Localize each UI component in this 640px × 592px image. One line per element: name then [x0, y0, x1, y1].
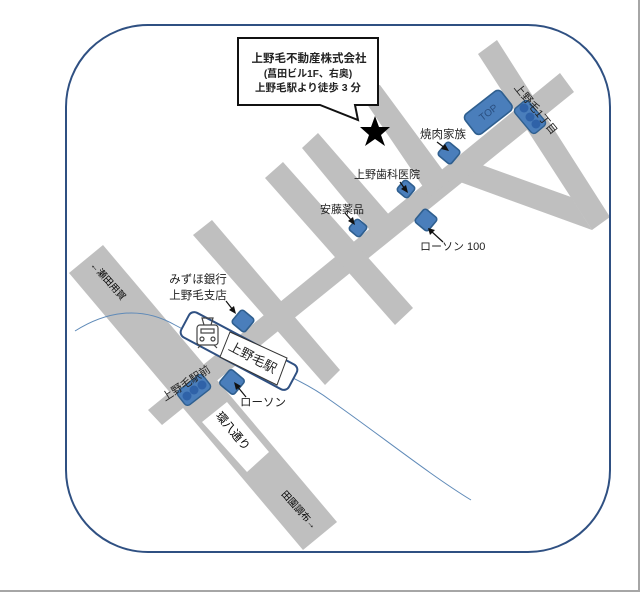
building: dental [396, 179, 416, 199]
signal label: station front: 上野毛駅前 [159, 362, 213, 404]
callout: (菖田ビル1F、右奥) [264, 67, 352, 80]
label: dental: 上野歯科医院 [354, 167, 420, 181]
building: Lawson [219, 369, 245, 395]
label: drugstore: 安藤薬品 [320, 203, 364, 216]
building: yakiniku [437, 141, 461, 165]
label: Mizuho bank: 上野毛支店 [169, 289, 227, 302]
TOP building: TOP [478, 102, 501, 124]
station [179, 310, 299, 392]
arrow: drugstore [345, 213, 355, 225]
label: yakiniku: 焼肉家族 [420, 127, 466, 141]
callout: 上野毛駅より徒歩 3 分 [255, 81, 361, 94]
signal label: 1-chome: 上野毛1丁目 [511, 81, 560, 137]
icon: train [197, 318, 218, 348]
label: Mizuho bank [169, 272, 227, 302]
road label: Kanpachi [202, 402, 269, 472]
arrow: Mizuho [226, 301, 236, 314]
TOP building [462, 88, 514, 136]
arrow: Lawson 100 [428, 228, 443, 242]
railway line [75, 313, 471, 500]
arrow: Lawson [234, 382, 246, 397]
station name box: 上野毛駅 [226, 339, 279, 376]
callout [238, 38, 378, 120]
callout: 上野毛不動産株式会社 [252, 51, 367, 65]
arrow: dental [400, 182, 408, 193]
traffic signal: station front [176, 373, 212, 407]
label: Lawson 100: ローソン 100 [420, 241, 485, 253]
road label: Kanpachi: 環八通り [213, 410, 252, 453]
building: drugstore [348, 218, 368, 238]
roads [69, 40, 610, 550]
icon: star location [360, 116, 390, 146]
road label: west direction: ←瀬田用賀 [88, 259, 128, 303]
road label: south direction: 田園調布→ [279, 488, 319, 532]
arrow: yakiniku [437, 142, 449, 151]
traffic signal: 1-chome [513, 99, 547, 135]
rounded map frame [66, 25, 610, 552]
arrows to buildings [226, 142, 449, 397]
label: Lawson: ローソン [240, 397, 286, 409]
building: Lawson 100 [414, 208, 438, 232]
building: Mizuho bank [231, 309, 255, 333]
blue building markers [219, 141, 461, 395]
label: Mizuho bank: みずほ銀行 [169, 272, 227, 286]
